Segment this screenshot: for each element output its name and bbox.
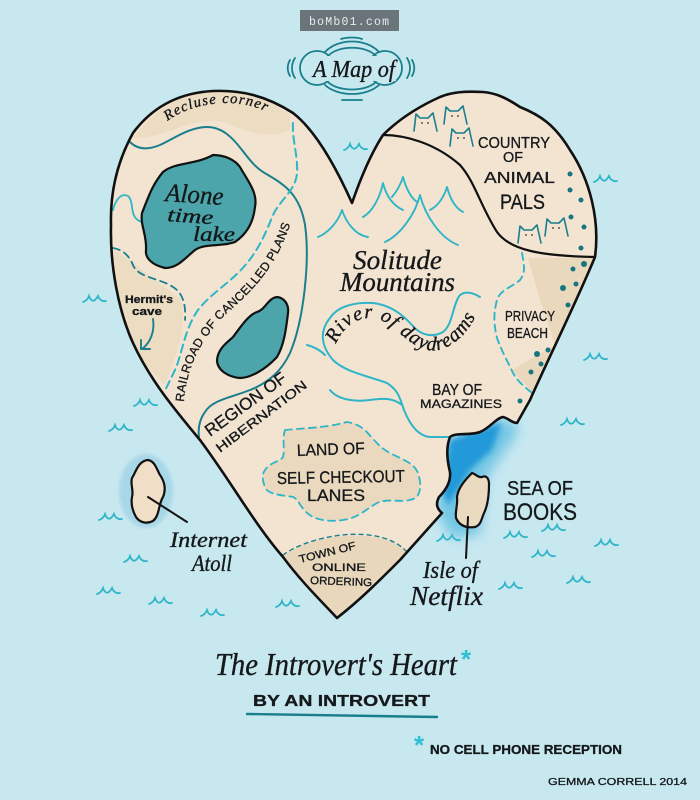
heading: A Map of: A Map of [311, 57, 398, 83]
beach dashed [494, 253, 532, 393]
country boundary [383, 135, 595, 257]
hermit dashed [113, 248, 185, 320]
label: Alone time lake: Alone [163, 178, 224, 211]
railroad dashed [165, 123, 297, 390]
label: Privacy Beach [505, 308, 555, 342]
mountains [318, 177, 463, 245]
cats [414, 106, 568, 243]
footnote: * [414, 730, 425, 760]
label: Privacy Beach: BEACH [507, 325, 548, 342]
label: Privacy Beach: PRIVACY [505, 308, 555, 325]
label: Bay of Magazines: BAY OF [432, 382, 482, 399]
label: Bay of Magazines: MAGAZINES [420, 399, 502, 411]
label: Country of Animal Pals: OF [503, 149, 523, 166]
town tint [283, 536, 407, 617]
recluse corner tint [133, 91, 290, 138]
label: Bay of Magazines [420, 382, 502, 411]
label: Alone time lake: time [167, 204, 214, 229]
label: Land of Self Checkout Lanes [277, 440, 405, 505]
label: Land of Self Checkout Lanes: SELF CHECKOUT [277, 467, 405, 488]
label: Country of Animal Pals: ANIMAL [484, 170, 555, 187]
heart outline [111, 91, 596, 618]
heart map [111, 91, 596, 618]
land [111, 91, 596, 618]
label: Railroad of cancelled plans: RAILROAD OF CANCELLED PLANS [176, 222, 290, 402]
label: Land of Self Checkout Lanes: LAND OF [297, 440, 365, 460]
sea shading near the coast [436, 418, 518, 538]
label: Isle of Netflix [409, 558, 483, 611]
hibernation boundary [130, 127, 307, 437]
label: Town of Online Ordering: TOWN OF [298, 540, 357, 566]
sea waves [83, 144, 618, 616]
footnote: NO CELL PHONE RECEPTION [430, 742, 622, 757]
region: self checkout land [263, 422, 420, 521]
label: Country of Animal Pals [478, 135, 555, 214]
label: Region of Hibernation: HIBERNATION [213, 377, 310, 455]
river of daydreams [307, 293, 480, 437]
label: Town of Online Ordering [298, 540, 372, 589]
credit: GEMMA CORRELL 2014 [548, 776, 687, 788]
icon: hermit cave arrow [141, 319, 153, 349]
label: Recluse corner: Recluse corner [163, 96, 269, 122]
label: Alone time lake [163, 178, 235, 246]
watermark: boMb01.com [309, 16, 389, 29]
label: Isle of Netflix: Isle of [422, 558, 481, 584]
label: Internet Atoll [169, 527, 248, 576]
label: Hermit's cave: cave [132, 306, 162, 318]
island: Internet Atoll [119, 454, 187, 528]
dashed border: self checkout [263, 422, 420, 521]
label: Isle of Netflix: Netflix [409, 581, 483, 611]
subtitle: by an introvert [247, 693, 437, 717]
island: Isle of Netflix [456, 473, 489, 558]
label: Country of Animal Pals: PALS [500, 191, 545, 214]
label: Town of Online Ordering: ONLINE [312, 562, 366, 574]
title: The Introvert's Heart [215, 646, 458, 682]
label: Hermit's cave [125, 294, 173, 318]
label: Sea of Books: BOOKS [503, 499, 577, 526]
label: Country of Animal Pals: COUNTRY [478, 135, 550, 152]
hermit cave tint [114, 250, 183, 385]
label: Internet Atoll: Internet [169, 527, 248, 552]
label: Sea of Books [503, 478, 577, 526]
lake: alone time [142, 155, 256, 268]
label: Solitude Mountains [339, 245, 455, 297]
label: Solitude Mountains: Solitude [353, 245, 442, 275]
label: Internet Atoll: Atoll [190, 551, 232, 576]
watermark [300, 10, 399, 31]
label: Solitude Mountains: Mountains [339, 267, 455, 297]
heading: A Map of [288, 38, 414, 100]
privacy beach tint [512, 258, 593, 392]
label: Alone time lake: lake [193, 222, 235, 246]
label: Town of Online Ordering: ORDERING [310, 575, 372, 589]
label: Sea of Books: SEA OF [507, 478, 573, 500]
subtitle: by an introvert: BY AN INTROVERT [253, 693, 430, 710]
title: * [461, 644, 472, 674]
footnote [414, 730, 622, 760]
label: Land of Self Checkout Lanes: LANES [307, 486, 365, 505]
label: Region of Hibernation: REGION OF [201, 368, 290, 440]
dots [518, 172, 587, 404]
label: Hermit's cave: Hermit's [125, 294, 173, 306]
label: River of daydreams: River of daydreams [325, 308, 474, 351]
label: Region of Hibernation [201, 368, 310, 455]
dashed border: town [283, 534, 407, 555]
lake: unnamed [217, 297, 288, 378]
small river [113, 195, 142, 222]
